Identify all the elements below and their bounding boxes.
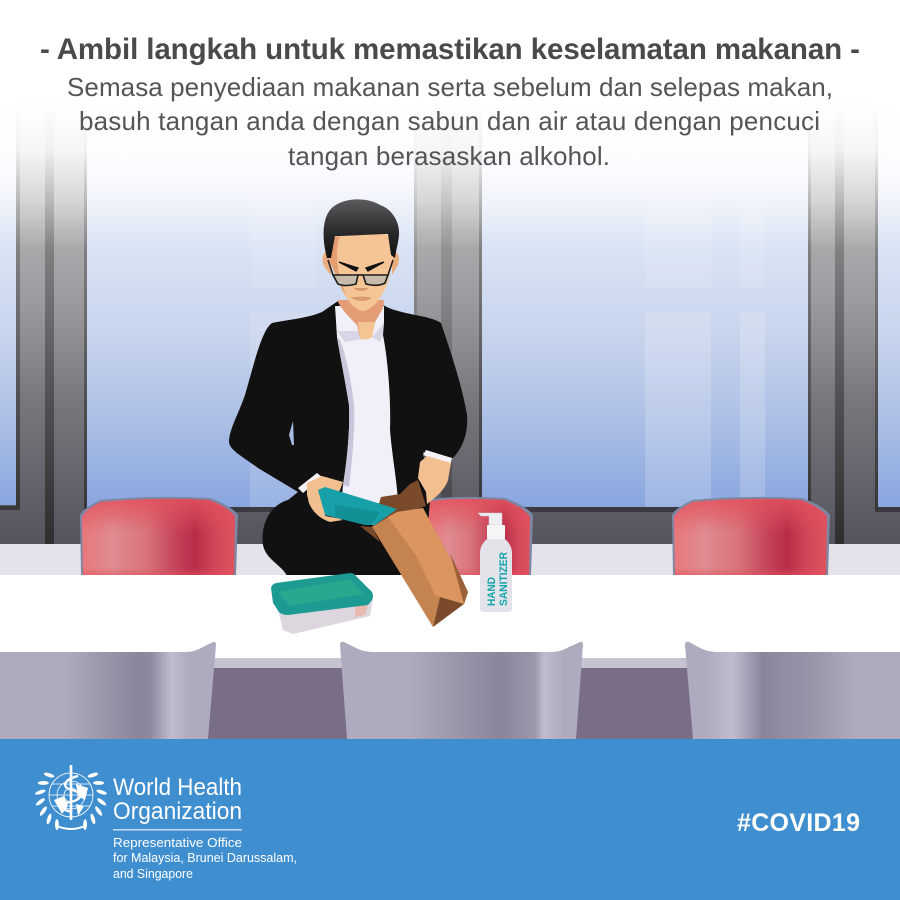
bottle label: HAND bbox=[486, 577, 498, 606]
footer band bbox=[0, 739, 900, 900]
front chair: centre bbox=[340, 642, 583, 739]
paper bag bbox=[360, 480, 468, 627]
body text: tangan berasaskan alkohol. bbox=[288, 141, 610, 171]
front chair: right bbox=[685, 642, 900, 739]
bottle label bbox=[486, 552, 510, 606]
arm gap bbox=[289, 421, 294, 445]
back chair: right bbox=[672, 497, 830, 575]
WHO office text: and Singapore bbox=[113, 867, 193, 881]
fingers over lid bbox=[308, 500, 343, 522]
right hand bbox=[418, 456, 451, 504]
background: windows and pillars bbox=[0, 0, 900, 544]
man bbox=[229, 199, 467, 576]
bottle body bbox=[480, 539, 512, 612]
right cuff bbox=[423, 450, 452, 466]
continents bbox=[54, 784, 88, 816]
front chair: left bbox=[0, 642, 216, 739]
teal lid in hand bbox=[318, 487, 397, 525]
face bbox=[330, 232, 393, 311]
far-side table strip bbox=[0, 544, 900, 576]
table edge bbox=[0, 658, 900, 668]
globe bbox=[49, 773, 93, 817]
shirt bbox=[335, 306, 398, 512]
neck bbox=[338, 300, 384, 339]
pump bbox=[478, 513, 502, 525]
floor under table bbox=[0, 668, 900, 740]
food container bbox=[271, 573, 373, 634]
WHO office text: for Malaysia, Brunei Darussalam, bbox=[113, 851, 297, 865]
table top bbox=[0, 575, 900, 659]
WHO office text: Representative Office bbox=[113, 836, 242, 850]
body text: Semasa penyediaan makanan serta sebelum dan selepas makan, bbox=[67, 72, 833, 102]
eyebrows bbox=[339, 262, 384, 271]
laurel wreath bbox=[35, 772, 107, 830]
nose and mouth bbox=[352, 288, 371, 300]
hand sanitizer bottle bbox=[478, 513, 512, 612]
WHO wordmark bbox=[113, 774, 242, 830]
bottle label: SANITIZER bbox=[498, 552, 510, 606]
left cuff bbox=[298, 473, 322, 493]
glasses bbox=[328, 260, 393, 286]
ears bbox=[322, 252, 399, 275]
staff and serpent bbox=[63, 765, 80, 820]
back chair: left bbox=[80, 497, 238, 575]
container lid bbox=[271, 573, 373, 615]
WHO wordmark: Organization bbox=[113, 798, 242, 825]
title: - Ambil langkah untuk memastikan keselamatan makanan - bbox=[40, 33, 860, 66]
back chair: centre bbox=[428, 497, 533, 575]
WHO wordmark: World Health bbox=[113, 774, 242, 801]
WHO emblem bbox=[35, 765, 107, 830]
body text: basuh tangan anda dengan sabun dan air atau dengan pencuci bbox=[79, 106, 820, 136]
WHO office text bbox=[113, 836, 297, 881]
container base bbox=[277, 598, 373, 634]
collar bbox=[487, 525, 505, 539]
hashtag: #COVID19 bbox=[737, 809, 860, 837]
body text bbox=[67, 72, 833, 171]
jacket bbox=[229, 301, 467, 576]
left hand bbox=[307, 476, 343, 521]
hair bbox=[324, 199, 399, 258]
